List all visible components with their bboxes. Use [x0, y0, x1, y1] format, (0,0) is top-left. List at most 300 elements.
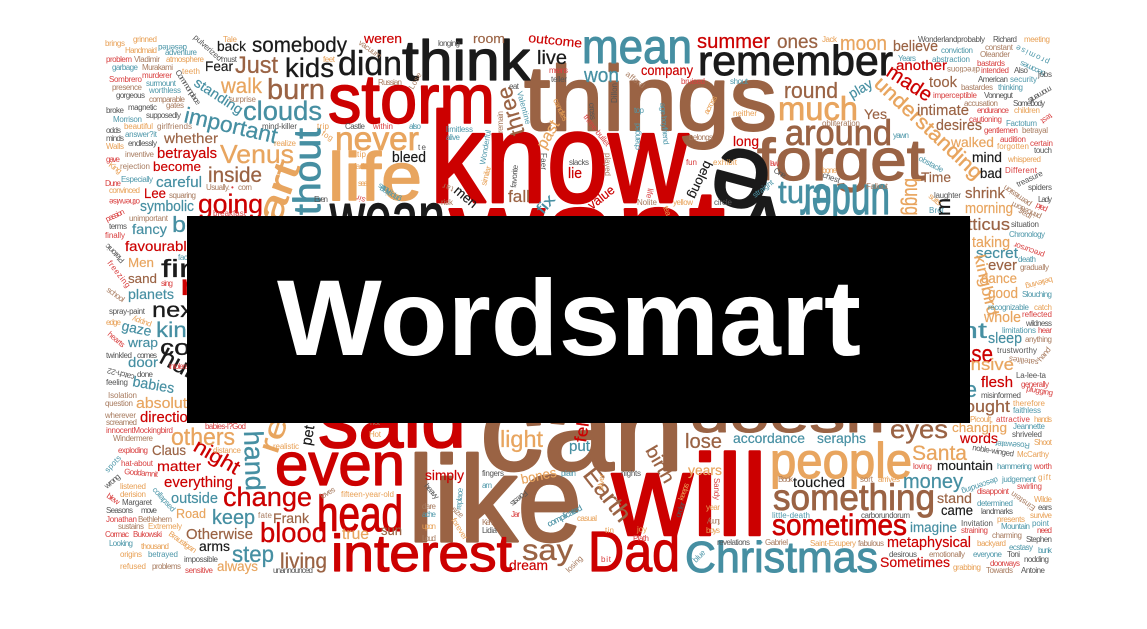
- medium words: symbolic: [140, 199, 194, 215]
- small words: obliteration: [822, 119, 860, 128]
- small words: laughter: [934, 191, 961, 200]
- medium words: took: [929, 74, 957, 91]
- medium words: direction: [140, 409, 196, 426]
- small words: squaring: [169, 191, 196, 200]
- small words: Fallout: [866, 182, 889, 191]
- small words: judgement: [1001, 475, 1037, 484]
- medium words: Lee: [144, 185, 166, 201]
- small words: refused: [120, 562, 146, 571]
- small words: yellow: [673, 198, 693, 207]
- small words: gates: [166, 101, 184, 110]
- small words: shriveled: [1012, 430, 1042, 439]
- small words: nights: [621, 469, 641, 478]
- medium words: Road: [176, 506, 206, 521]
- medium words: inside: [208, 164, 262, 187]
- small words: limitless: [446, 125, 473, 134]
- medium words: fel: [571, 421, 593, 444]
- medium words: sand: [128, 271, 157, 286]
- small words: reflected: [1022, 310, 1052, 319]
- small words: tip: [357, 150, 367, 159]
- medium words: matter: [157, 458, 201, 474]
- medium words: walk: [220, 75, 262, 98]
- medium words: believe: [893, 38, 938, 55]
- small words: worthless: [148, 86, 181, 95]
- small words: satellites: [1008, 354, 1039, 367]
- small words: catch-22: [106, 366, 136, 382]
- medium words: good: [988, 286, 1018, 302]
- small words: hearts: [106, 330, 127, 349]
- word: remember: remember: [698, 37, 893, 84]
- word: know: know: [430, 87, 688, 230]
- small words: babies-I?God: [205, 422, 246, 431]
- small words: backyard: [977, 539, 1006, 548]
- medium words: complicated: [545, 502, 584, 529]
- small words: supposedly: [146, 111, 181, 120]
- small words: pulverized: [192, 33, 224, 63]
- small words: Bret: [929, 206, 945, 215]
- small words: certain: [1030, 139, 1053, 148]
- small words: Russian: [378, 78, 402, 87]
- small words: children: [1014, 106, 1040, 115]
- small words: surmount: [146, 79, 177, 88]
- medium words: Just: [235, 52, 278, 79]
- medium words: seraphs: [817, 430, 866, 446]
- medium words: pet: [298, 423, 319, 447]
- medium words: lose: [685, 431, 722, 453]
- small words: forgotten: [997, 142, 1029, 151]
- medium words: fancy: [132, 221, 167, 237]
- medium words: outside: [171, 491, 218, 507]
- small words: Walls: [106, 142, 124, 151]
- small words: One: [772, 166, 788, 181]
- small words: Tale: [223, 35, 238, 44]
- medium words: change: [223, 482, 312, 512]
- medium words: whole: [983, 310, 1021, 326]
- small words: plugging: [1026, 384, 1054, 398]
- small words: done: [137, 370, 154, 379]
- small words: Jeannette: [1013, 422, 1046, 431]
- small words: distance: [213, 446, 242, 455]
- small words: top: [634, 106, 645, 115]
- small words: life: [644, 188, 655, 200]
- medium words: birth: [642, 442, 679, 487]
- small words: Book: [778, 475, 794, 484]
- medium words: long: [733, 133, 759, 149]
- small words: comes: [137, 351, 157, 360]
- medium words: Atticus: [955, 215, 1010, 234]
- small words: fog: [320, 129, 335, 143]
- small words: keeps: [676, 482, 691, 502]
- small words: Valentine: [515, 90, 533, 126]
- small words: size: [450, 505, 466, 520]
- medium words: kids: [285, 53, 334, 83]
- medium words: careful: [156, 174, 202, 191]
- small words: catch: [1034, 303, 1052, 312]
- medium words: step: [232, 541, 274, 567]
- small words: order: [673, 500, 687, 519]
- small words: thousand: [141, 542, 169, 551]
- small words: Somebody: [1013, 99, 1045, 108]
- small words: directions: [947, 65, 980, 74]
- small words: constant: [985, 43, 1014, 52]
- small words: Loud: [422, 534, 436, 543]
- small words: doorways: [990, 559, 1020, 568]
- medium words: clouds: [243, 96, 322, 126]
- small words: Bukowski: [133, 530, 162, 539]
- medium words: living: [280, 550, 327, 573]
- small words: nodding: [1024, 555, 1049, 564]
- small words: conviction: [941, 46, 973, 55]
- medium words: value: [585, 182, 617, 212]
- small words: blew: [105, 491, 122, 507]
- medium words: fall: [508, 187, 530, 206]
- small words: Commonplace: [173, 68, 203, 107]
- small words: Cormac: [105, 530, 129, 539]
- small words: te: [418, 143, 427, 152]
- small words: forever: [449, 516, 470, 542]
- small words: puppy: [131, 314, 153, 330]
- small words: therefore: [1013, 399, 1046, 408]
- small words: boys: [706, 526, 720, 535]
- medium words: shrink: [965, 185, 1005, 202]
- small words: gradually: [1020, 263, 1049, 272]
- small words: McCarthy: [1017, 450, 1049, 459]
- small words: bone: [822, 166, 838, 175]
- medium words: company: [641, 63, 693, 78]
- small words: collapsed: [151, 485, 177, 514]
- small words: finally: [105, 231, 125, 240]
- small words: remain: [496, 111, 505, 133]
- small words: generally: [1021, 380, 1049, 389]
- medium words: next: [152, 299, 200, 322]
- medium words: back: [217, 38, 247, 54]
- small words: Faer: [539, 153, 548, 170]
- medium words: night: [190, 435, 244, 480]
- small words: Nolite: [637, 198, 658, 207]
- medium words: betrayals: [157, 146, 217, 162]
- medium words: r: [180, 269, 194, 302]
- small words: attractive: [996, 415, 1031, 424]
- small words: year: [706, 503, 720, 512]
- small words: cautioning: [969, 115, 1002, 124]
- small words: alive: [446, 133, 461, 142]
- small words: jobs: [1037, 70, 1052, 79]
- small words: brings: [105, 39, 125, 48]
- small words: three-bullet: [581, 113, 612, 149]
- small words: emotionally: [929, 550, 965, 559]
- medium words: dream: [509, 558, 548, 573]
- medium words: Santa: [912, 442, 967, 465]
- medium words: fix: [533, 191, 559, 218]
- medium words: accordance: [733, 430, 805, 446]
- medium words: fir: [161, 255, 191, 283]
- small words: feeling: [106, 378, 128, 387]
- medium words: Time: [921, 169, 951, 185]
- medium words: didn: [338, 45, 402, 83]
- small words: thinking: [998, 83, 1023, 92]
- word: e: e: [695, 122, 782, 250]
- small words: adventure: [165, 48, 198, 57]
- small words: Forests: [508, 488, 529, 508]
- medium words: came: [941, 502, 973, 518]
- small words: betrayal: [1022, 126, 1048, 135]
- medium words: planets: [128, 286, 174, 302]
- small words: Lidia: [482, 526, 498, 535]
- medium words: moon: [840, 33, 887, 55]
- large words: [248, 21, 987, 584]
- small words: survive: [1030, 511, 1053, 520]
- small words: disappoint: [977, 487, 1010, 496]
- word: said: said: [318, 376, 466, 464]
- small words: murderer: [142, 71, 172, 80]
- medium words: money: [903, 471, 963, 493]
- small words: treasure: [1015, 169, 1045, 189]
- small words: age boyfriend: [658, 102, 671, 145]
- medium words: hand: [238, 430, 270, 491]
- small words: Stephen: [1026, 535, 1052, 544]
- medium words: be: [172, 212, 200, 237]
- small words: funny: [707, 517, 720, 526]
- word: think: think: [402, 29, 531, 93]
- medium words: eyes: [890, 414, 948, 444]
- medium words: arms: [199, 538, 230, 554]
- small words: teeth: [182, 67, 200, 76]
- word: storm: storm: [328, 60, 495, 138]
- word: head: head: [317, 486, 403, 542]
- small words: touch: [1034, 146, 1052, 155]
- word: thout: thout: [287, 128, 329, 215]
- small words: twinkled: [106, 351, 132, 360]
- small words: realize: [274, 139, 297, 148]
- medium words: blood: [260, 517, 327, 548]
- medium words: Venus: [220, 139, 294, 169]
- small words: similar: [479, 165, 493, 187]
- medium words: col: [160, 335, 196, 360]
- small words: presence: [112, 83, 143, 92]
- small words: American: [978, 75, 1008, 84]
- small words: Mountain: [1001, 522, 1030, 531]
- small words: silver: [596, 473, 607, 491]
- small words: school: [105, 285, 127, 304]
- small words: fingers: [482, 469, 504, 478]
- medium words: Men: [128, 255, 154, 270]
- small words: King: [107, 160, 123, 176]
- small words: odds: [106, 126, 121, 135]
- small words: Braustigan: [167, 529, 198, 555]
- small words: yawn: [893, 131, 909, 140]
- small words: loves: [318, 485, 337, 501]
- medium words: babies: [131, 374, 175, 397]
- small words: sensitive: [185, 566, 214, 575]
- word: Dad: Dad: [588, 520, 680, 584]
- small words: Hot: [369, 430, 382, 439]
- small words: question: [105, 399, 133, 408]
- small words: bastards: [977, 59, 1005, 68]
- small words: test: [1038, 111, 1054, 126]
- small words: mind-killer: [262, 122, 297, 131]
- small words: Plath: [633, 534, 649, 543]
- medium words: ones: [777, 32, 818, 53]
- small words: Vladimir: [134, 55, 160, 64]
- medium words: sleep: [988, 331, 1022, 347]
- medium words: another: [896, 58, 948, 73]
- medium words: mountain: [937, 458, 993, 473]
- small words: spots: [103, 454, 123, 474]
- small words: rejection: [120, 162, 150, 171]
- small words: worth: [1033, 462, 1052, 471]
- small words: everyone: [973, 550, 1003, 559]
- small words: gripping: [378, 184, 403, 204]
- small words: heavy: [422, 482, 441, 501]
- small words: a.m: [482, 481, 492, 490]
- small words: believing: [1024, 275, 1054, 291]
- small words: hat-about: [121, 459, 154, 468]
- small words: teller: [551, 75, 567, 84]
- word: under: under: [800, 173, 890, 235]
- small words: [102, 33, 1054, 575]
- medium words: always: [217, 558, 258, 574]
- small words: situation: [1011, 220, 1039, 229]
- small words: intolerant: [169, 362, 195, 371]
- medium words: made: [882, 61, 936, 106]
- small words: noble-winged: [972, 443, 1015, 459]
- medium words: words: [959, 431, 998, 446]
- small words: wrong: [102, 472, 122, 491]
- small words: Platonic: [103, 242, 126, 265]
- small words: misinformed: [981, 391, 1021, 400]
- small words: longing: [438, 39, 460, 48]
- small words: Picoult,: [970, 415, 993, 424]
- small words: Castle: [345, 122, 366, 131]
- medium words: sun: [381, 523, 402, 538]
- medium words: play: [846, 75, 875, 102]
- small words: •: [760, 538, 763, 547]
- small words: fifteen-year-old: [341, 490, 394, 499]
- medium words: won: [583, 65, 619, 87]
- medium words: metaphysical: [887, 535, 971, 551]
- small words: eat: [509, 82, 520, 91]
- small words: Gabriel: [765, 538, 788, 547]
- small words: •: [231, 183, 234, 192]
- medium words: standing: [191, 74, 246, 117]
- medium words: walked: [950, 134, 994, 150]
- medium words: somebody: [252, 34, 347, 57]
- small words: audition: [1000, 135, 1026, 144]
- word: forget: forget: [757, 128, 925, 193]
- small words: answer?it: [125, 130, 158, 139]
- small words: limitations: [1002, 326, 1036, 335]
- medium words: absolute: [136, 395, 196, 412]
- medium words: wrap: [127, 335, 158, 350]
- small words: meeting: [1024, 35, 1050, 44]
- word: mean: mean: [582, 21, 692, 74]
- small words: Dune: [105, 179, 122, 188]
- small words: afford: [624, 69, 647, 90]
- word: much: much: [778, 90, 858, 127]
- word: v: v: [736, 175, 789, 279]
- small words: sea: [358, 179, 369, 188]
- small words: Usually.: [206, 183, 230, 192]
- medium words: re: [252, 413, 295, 457]
- word cloud: [102, 21, 1054, 584]
- word: wean: wean: [329, 178, 445, 256]
- small words: security: [1010, 75, 1037, 84]
- medium words: outcome: [528, 30, 583, 51]
- small words: bruised: [681, 77, 705, 86]
- small words: freezing: [105, 259, 132, 289]
- small words: sing: [161, 279, 173, 288]
- medium words: whether: [163, 130, 218, 146]
- small words: Bethlehem: [138, 515, 172, 524]
- medium words: weren: [363, 31, 402, 46]
- medium words: morning: [965, 200, 1013, 217]
- medium words: summer: [697, 31, 770, 53]
- small words: surprise: [229, 95, 257, 104]
- small words: precursor: [1012, 240, 1046, 260]
- small words: tin: [605, 526, 614, 535]
- small words: trip: [317, 122, 330, 131]
- small words: paid: [1034, 201, 1049, 214]
- small words: Sandy: [712, 478, 721, 500]
- small words: cross: [587, 102, 597, 120]
- small words: gave: [106, 155, 121, 164]
- word: understanding: understanding: [870, 73, 987, 184]
- medium words: simply: [425, 467, 464, 483]
- small words: Slouching: [1022, 290, 1052, 299]
- medium words: e: [965, 377, 977, 402]
- medium words: belong: [685, 159, 716, 201]
- medium words: men: [451, 183, 481, 211]
- small words: Handmaid: [125, 46, 157, 55]
- small words: means: [549, 66, 568, 75]
- word: life: life: [328, 139, 422, 215]
- small words: whispered: [1007, 155, 1041, 164]
- small words: hands: [1034, 415, 1052, 424]
- small words: Years: [898, 54, 916, 63]
- small words: Murakami: [142, 63, 173, 72]
- small words: hand: [1036, 345, 1053, 363]
- small words: broke: [106, 106, 125, 115]
- small words: upon: [422, 522, 436, 531]
- small words: Seasons: [106, 506, 133, 515]
- small words: Morrison: [113, 115, 142, 124]
- small words: ecstasy: [1009, 543, 1033, 552]
- small words: origins: [120, 550, 142, 559]
- small words: hot: [370, 418, 381, 427]
- medium words: past: [534, 117, 564, 152]
- small words: comparable: [149, 95, 186, 104]
- small words: atmosphere: [166, 55, 205, 64]
- small words: listened: [120, 482, 146, 491]
- medium words: keep: [212, 507, 255, 529]
- medium words: secret: [976, 245, 1019, 262]
- small words: spiders: [1028, 183, 1052, 192]
- small words: suits: [927, 192, 943, 208]
- small words: Lose: [407, 70, 424, 91]
- small words: loving: [913, 462, 932, 471]
- word: even: even: [275, 431, 405, 498]
- small words: Different: [1005, 166, 1038, 175]
- small words: permission: [1002, 183, 1033, 209]
- small words: need: [1037, 526, 1052, 535]
- small words: Jar: [511, 510, 520, 519]
- small words: move: [141, 506, 158, 515]
- small words: risk: [441, 198, 454, 207]
- small words: Vonnegut: [984, 91, 1014, 100]
- small words: hairs: [376, 181, 393, 196]
- small words: bit: [601, 555, 612, 564]
- medium words: true: [342, 526, 369, 543]
